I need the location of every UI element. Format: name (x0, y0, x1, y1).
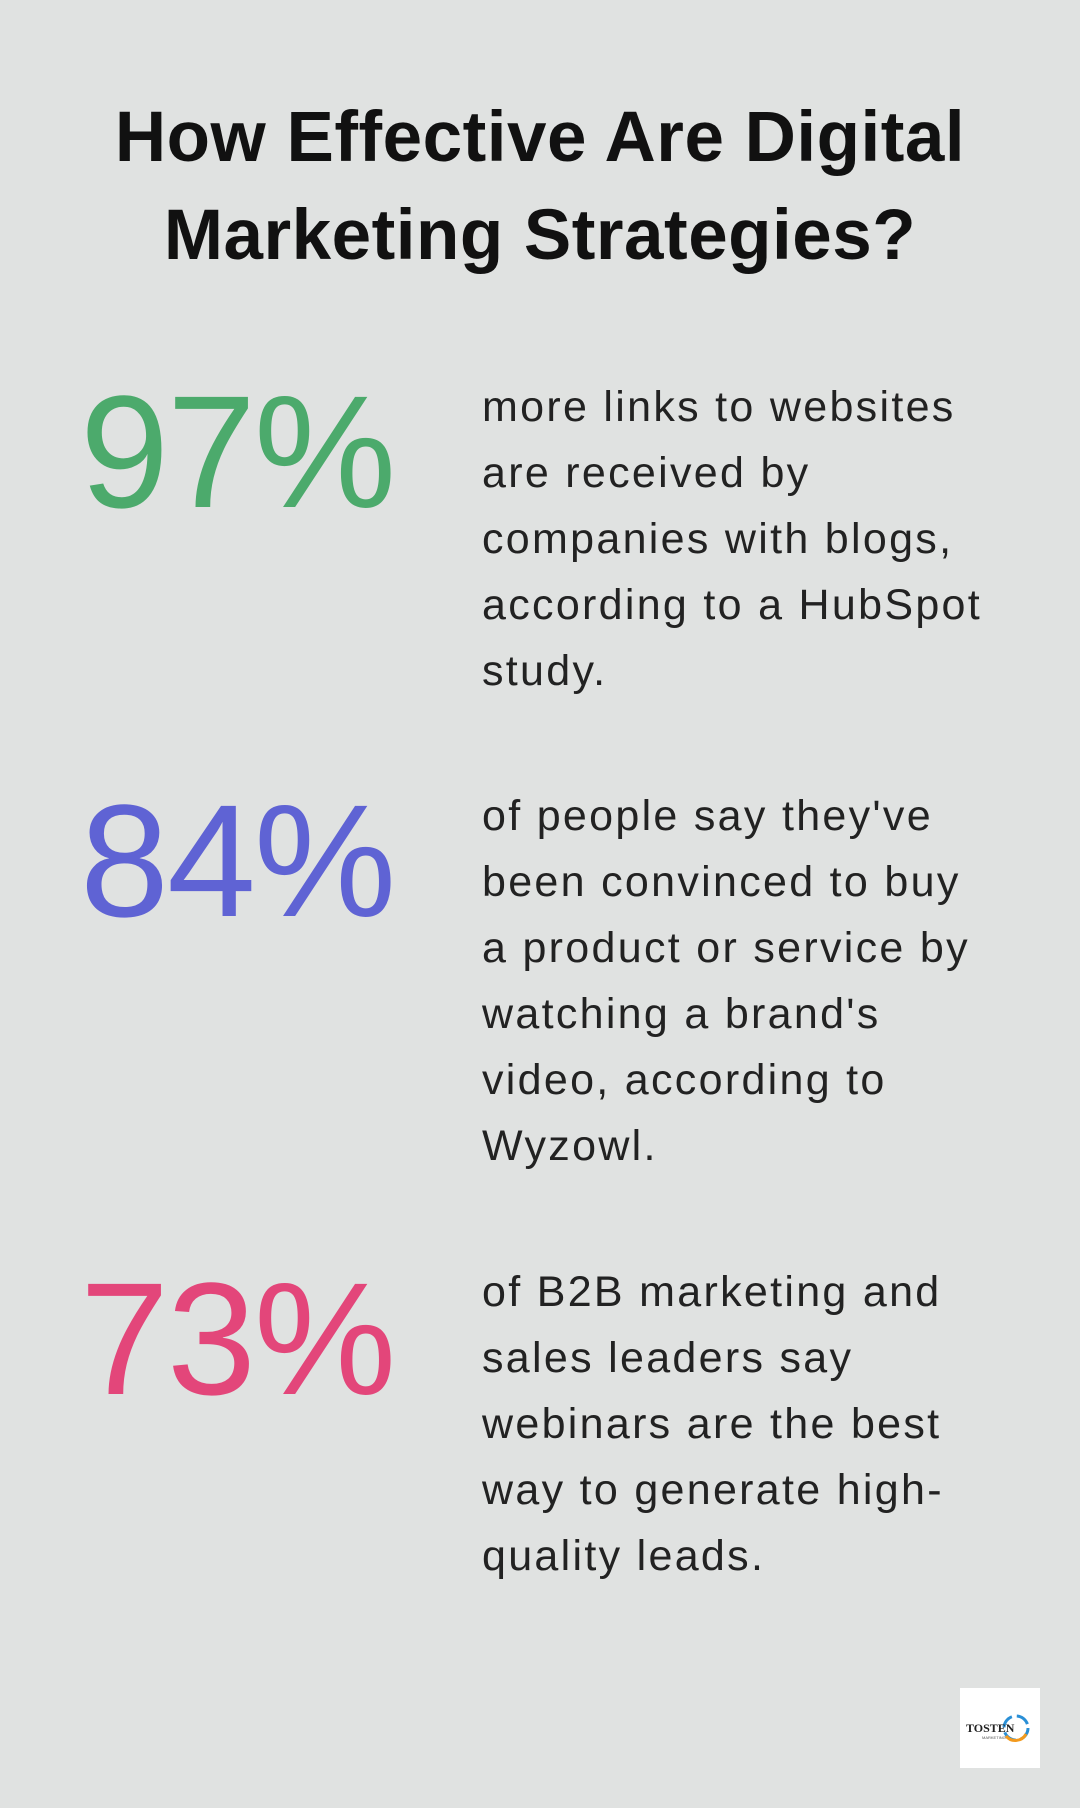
text: 73% description: of B2B marketing and (482, 1268, 942, 1316)
title: Marketing Strategies? (164, 196, 916, 275)
text: 84% description: video, according to (482, 1056, 887, 1104)
stat: 73%: 73% (80, 1249, 394, 1428)
text: 84% description (482, 792, 970, 1170)
stat: 97%: 97% (80, 362, 394, 541)
text: 97% description: more links to websites (482, 383, 956, 431)
text: 97% description (482, 383, 982, 695)
logo (960, 1688, 1040, 1768)
text: 97% description: study. (482, 647, 607, 695)
text: 73% description (482, 1268, 944, 1580)
text: 84% description: been convinced to buy (482, 858, 961, 906)
text: 73% description: sales leaders say (482, 1334, 853, 1382)
stat: 84%: 84% (80, 771, 394, 950)
logo: MARKETING (982, 1735, 1006, 1740)
title (115, 98, 965, 275)
text: 84% description: a product or service by (482, 924, 970, 972)
text: 84% description: of people say they've (482, 792, 933, 840)
text: 73% description: way to generate high- (482, 1466, 944, 1514)
logo: TOSTEN (966, 1721, 1015, 1735)
title: How Effective Are Digital (115, 98, 965, 177)
text: 97% description: companies with blogs, (482, 515, 953, 563)
text: 84% description: watching a brand's (482, 990, 881, 1038)
text: 73% description: quality leads. (482, 1532, 765, 1580)
text: 97% description: are received by (482, 449, 810, 497)
text: 73% description: webinars are the best (482, 1400, 941, 1448)
text: 97% description: according to a HubSpot (482, 581, 982, 629)
text: 84% description: Wyzowl. (482, 1122, 658, 1170)
